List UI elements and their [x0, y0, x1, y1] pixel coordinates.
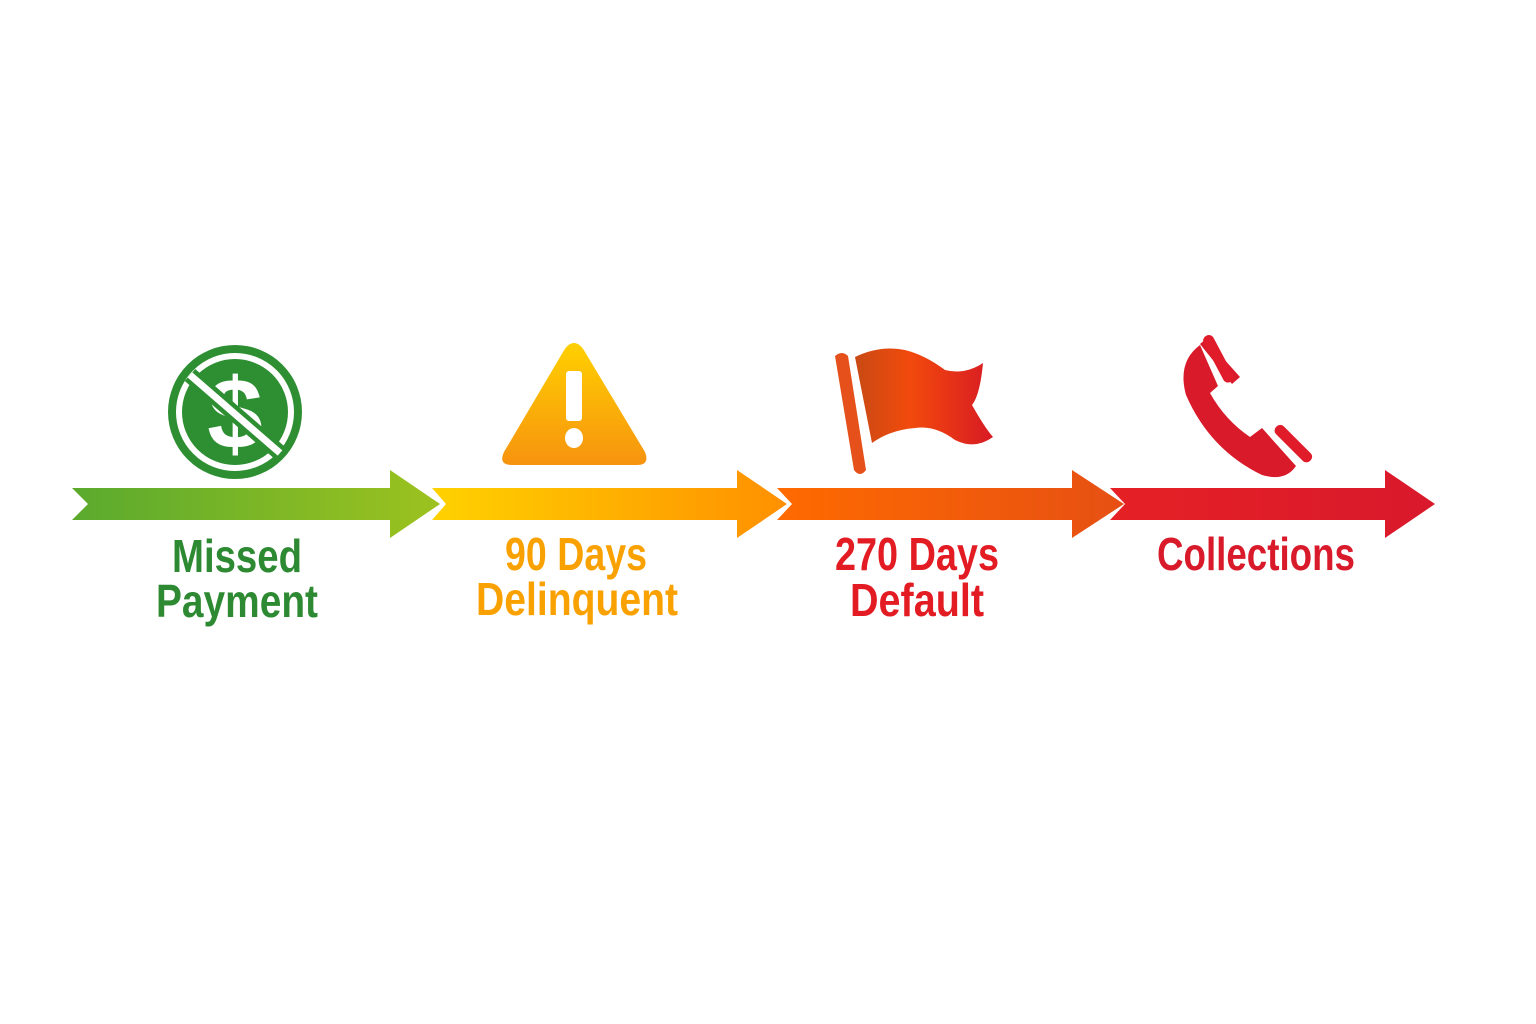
label: 90 days delinquent: Delinquent: [476, 573, 678, 625]
label: missed payment: [156, 530, 318, 627]
icon: phone: [1183, 333, 1314, 477]
label: missed payment: Payment: [156, 575, 318, 627]
label: 270 days default: Default: [850, 574, 984, 626]
label: collections: Collections: [1157, 528, 1355, 580]
icon: no dollar: [168, 345, 302, 479]
arrow: 270 days: [777, 470, 1124, 538]
label: 270 days default: [835, 528, 999, 626]
icon: flag: [835, 349, 993, 474]
arrow: collections: [1110, 470, 1435, 538]
arrow: 90 days: [432, 470, 787, 538]
icon: warning triangle: [502, 343, 646, 465]
label: missed payment: Missed: [172, 530, 302, 582]
arrow: missed payment: [72, 470, 440, 538]
icon: no dollar: $: [207, 358, 263, 470]
label: 90 days delinquent: [476, 528, 678, 625]
label: 270 days default: 270 Days: [835, 528, 999, 580]
label: 90 days delinquent: 90 Days: [505, 528, 647, 580]
